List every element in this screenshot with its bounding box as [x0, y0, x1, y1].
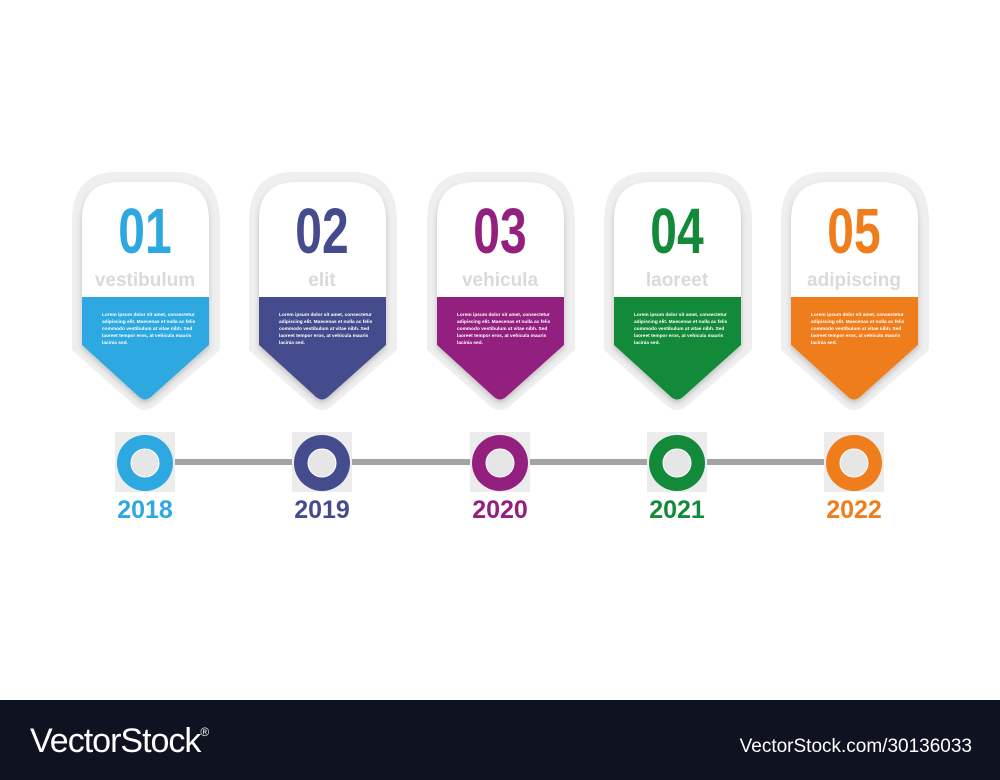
panel: 05: commodo vestibulum at vitae nibh. Sed [811, 326, 901, 332]
panel: 03: laoreet tempor eros, at vehicula mauris [457, 333, 547, 339]
panel: 04: Lorem ipsum dolor sit amet, consectetur [634, 312, 727, 318]
panel: 01: 01 [118, 195, 172, 267]
marker: 2022 [824, 432, 884, 524]
panel: 03: vehicula [462, 270, 538, 291]
marker: 2018: 2018 [117, 496, 173, 524]
panel: 03: commodo vestibulum at vitae nibh. Sed [457, 326, 547, 332]
panel: 01: lacinia sed. [102, 340, 128, 346]
panel: 05: adipiscing elit. Maecenas et nulla ac felis [811, 319, 905, 325]
panel: 05: 05 [827, 195, 881, 267]
panel: 02: lacinia sed. [279, 340, 305, 346]
footer bar: VectorStock.com/30136033 [740, 736, 972, 757]
timeline line [175, 459, 825, 465]
marker: 2020 [470, 432, 530, 524]
panel: 04: adipiscing elit. Maecenas et nulla ac felis [634, 319, 728, 325]
panel: 02: 02 [295, 195, 349, 267]
marker: 2021: 2021 [649, 496, 705, 524]
panel: 04: laoreet tempor eros, at vehicula mauris [634, 333, 724, 339]
marker: 2019: 2019 [294, 496, 350, 524]
panel: 04: lacinia sed. [634, 340, 660, 346]
footer bar: ® [200, 725, 209, 739]
panel: 03: adipiscing elit. Maecenas et nulla ac felis [457, 319, 551, 325]
panel: 04: commodo vestibulum at vitae nibh. Sed [634, 326, 724, 332]
panel: 04 [604, 172, 752, 410]
panel: 02: laoreet tempor eros, at vehicula mauris [279, 333, 369, 339]
panel: 03: lacinia sed. [457, 340, 483, 346]
timeline infographic [0, 172, 1000, 780]
marker: 2021 [647, 432, 707, 524]
panel: 02: Lorem ipsum dolor sit amet, consectetur [279, 312, 372, 318]
marker: 2018 [115, 432, 175, 524]
panel: 05: adipiscing [807, 270, 901, 291]
panel: 02: adipiscing elit. Maecenas et nulla ac felis [279, 319, 373, 325]
marker: 2022: 2022 [826, 496, 882, 524]
panel: 04: 04 [650, 195, 704, 267]
panel: 05: laoreet tempor eros, at vehicula mauris [811, 333, 901, 339]
panel: 05: lacinia sed. [811, 340, 837, 346]
marker: 2019 [292, 432, 352, 524]
panel: 03: 03 [473, 195, 527, 267]
footer bar [0, 700, 1000, 780]
panel: 01: adipiscing elit. Maecenas et nulla ac felis [102, 319, 196, 325]
footer bar: VectorStock [30, 722, 200, 760]
marker: 2020: 2020 [472, 496, 528, 524]
panel: 05 [781, 172, 929, 410]
panel: 01: vestibulum [95, 270, 195, 291]
panel: 01: Lorem ipsum dolor sit amet, consectetur [102, 312, 195, 318]
panel: 04: laoreet [646, 270, 709, 291]
panel: 03 [427, 172, 575, 410]
panel: 02: elit [308, 270, 336, 291]
panel: 02 [249, 172, 397, 410]
panel: 03: Lorem ipsum dolor sit amet, consectetur [457, 312, 550, 318]
panel: 01: laoreet tempor eros, at vehicula mauris [102, 333, 192, 339]
panel: 02: commodo vestibulum at vitae nibh. Sed [279, 326, 369, 332]
panel: 05: Lorem ipsum dolor sit amet, consectetur [811, 312, 904, 318]
panel: 01: commodo vestibulum at vitae nibh. Sed [102, 326, 192, 332]
panel: 01 [72, 172, 220, 410]
